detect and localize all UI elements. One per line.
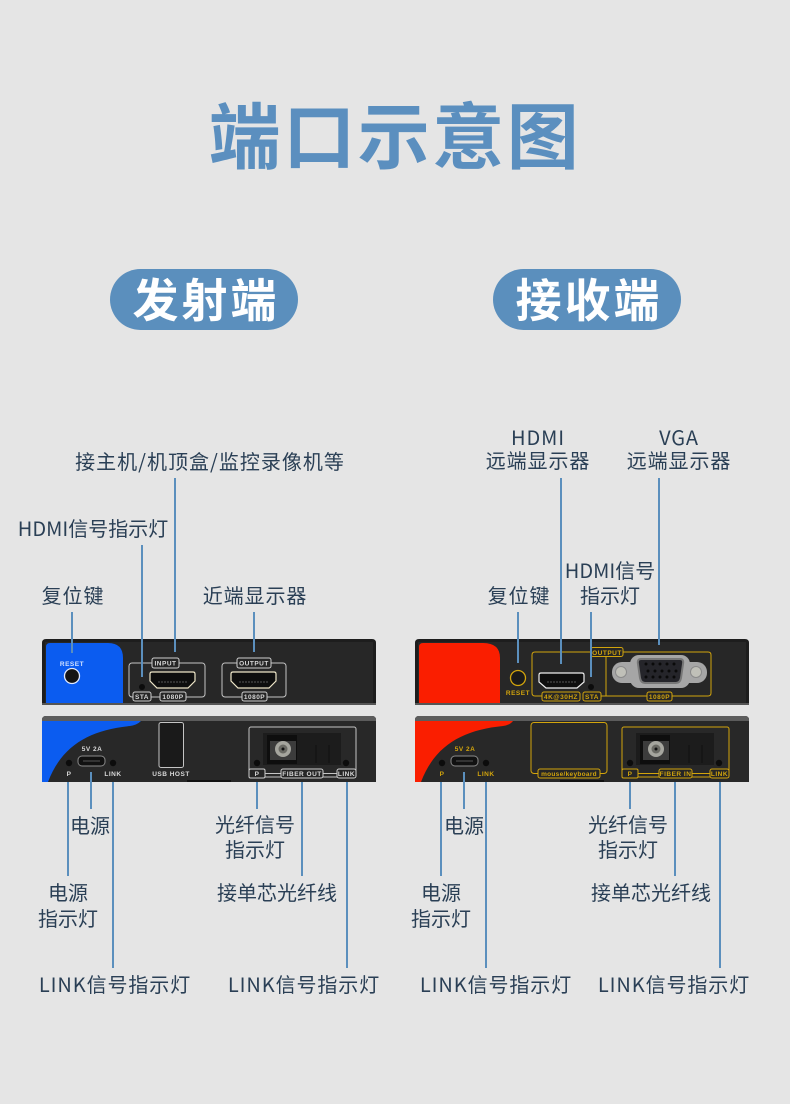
fiber in group: LINK [711,771,728,778]
panel: receiver front device [415,639,749,705]
label: power, receiver: 电源 [444,810,484,839]
label: host devices: 接主机/机顶盒/监控录像机等 [75,446,345,475]
blue front plate [46,643,123,703]
label: LINK indicator 1, transmitter: LINK信号指示灯 [39,969,191,998]
fiber out group: P [255,771,260,778]
input HDMI group: STA [135,694,149,701]
P indicator: P [440,771,445,778]
LINK indicator [104,760,122,778]
reset button [506,670,530,697]
output HDMI group: OUTPUT [239,660,269,668]
fiber in group: P [628,771,633,778]
label: power indicator, transmitter: 指示灯 [38,903,98,932]
VGA output group: 1080P [649,694,670,701]
input HDMI group: INPUT [154,660,176,668]
leader lines: receiver [441,478,720,968]
pill heading: receiver: 接收端 [516,265,662,331]
label: HDMI signal indicator, receiver: 指示灯 [580,580,640,609]
5V power port: 5V 2A [455,746,475,753]
P indicator: P [67,771,72,778]
label: fiber indicator, receiver: 光纤信号 [588,809,668,838]
LINK indicator [477,760,495,778]
mouse/keyboard port [531,722,607,778]
reset button: RESET [60,661,84,668]
fiber in group [622,727,729,778]
label: LINK indicator 2, transmitter: LINK信号指示灯 [228,969,380,998]
fiber out group: FIBER OUT [282,771,322,778]
HDMI output group: 4K@30HZ [544,694,578,701]
mouse/keyboard port: mouse/keyboard [541,771,597,778]
label: single-core fiber, transmitter: 接单芯光纤线 [217,877,337,906]
red swoosh [415,721,513,782]
5V power port: 5V 2A [82,746,102,753]
label: fiber indicator, receiver: 指示灯 [598,834,658,863]
VGA output group [591,648,711,701]
output HDMI group [222,658,286,701]
HDMI output group: STA [585,694,599,701]
label: HDMI signal indicator: HDMI信号指示灯 [18,513,168,542]
label: fiber indicator, transmitter: 光纤信号 [215,809,295,838]
fiber out group: LINK [338,771,355,778]
P indicator [66,760,72,778]
red front plate [419,643,500,703]
label: reset key, transmitter: 复位键 [42,580,104,609]
label: power indicator, receiver: 电源 [421,877,461,906]
label: VGA remote display: 远端显示器 [627,445,731,474]
label: VGA remote display: VGA [659,422,699,451]
P indicator [439,760,445,778]
panel: transmitter rear device [42,716,376,782]
panel: receiver rear device [415,716,749,782]
LINK indicator: LINK [477,771,495,778]
label: HDMI signal indicator, receiver: HDMI信号 [565,555,655,584]
label: single-core fiber, receiver: 接单芯光纤线 [591,877,711,906]
HDMI output group [532,652,606,701]
5V power port [78,746,105,766]
leader lines: transmitter [68,478,347,968]
label: LINK indicator 2, receiver: LINK信号指示灯 [598,969,750,998]
USB host port: USB HOST [152,771,190,778]
label: near-end display: 近端显示器 [203,580,307,609]
reset button: RESET [506,690,530,697]
fiber out group [249,727,356,778]
label: reset key, receiver: 复位键 [488,580,550,609]
title: 端口示意图 [209,79,581,184]
LINK indicator: LINK [104,771,122,778]
reset button [60,661,84,684]
5V power port [451,746,478,766]
pill heading: transmitter: 发射端 [132,265,280,331]
panel: transmitter front device [42,639,376,705]
VGA output group: OUTPUT [592,650,622,657]
label: power, transmitter: 电源 [70,810,110,839]
input HDMI group: 1080P [162,694,184,701]
label: power indicator, receiver: 指示灯 [411,903,471,932]
fiber in group: FIBER IN [660,771,691,778]
USB host port [152,722,190,778]
label: HDMI remote display: 远端显示器 [486,445,590,474]
label: HDMI remote display: HDMI [511,422,565,451]
blue swoosh [42,721,141,782]
label: LINK indicator 1, receiver: LINK信号指示灯 [420,969,572,998]
output HDMI group: 1080P [244,694,265,701]
label: power indicator, transmitter: 电源 [48,877,88,906]
input HDMI group [129,658,205,701]
label: fiber indicator, transmitter: 指示灯 [225,834,285,863]
